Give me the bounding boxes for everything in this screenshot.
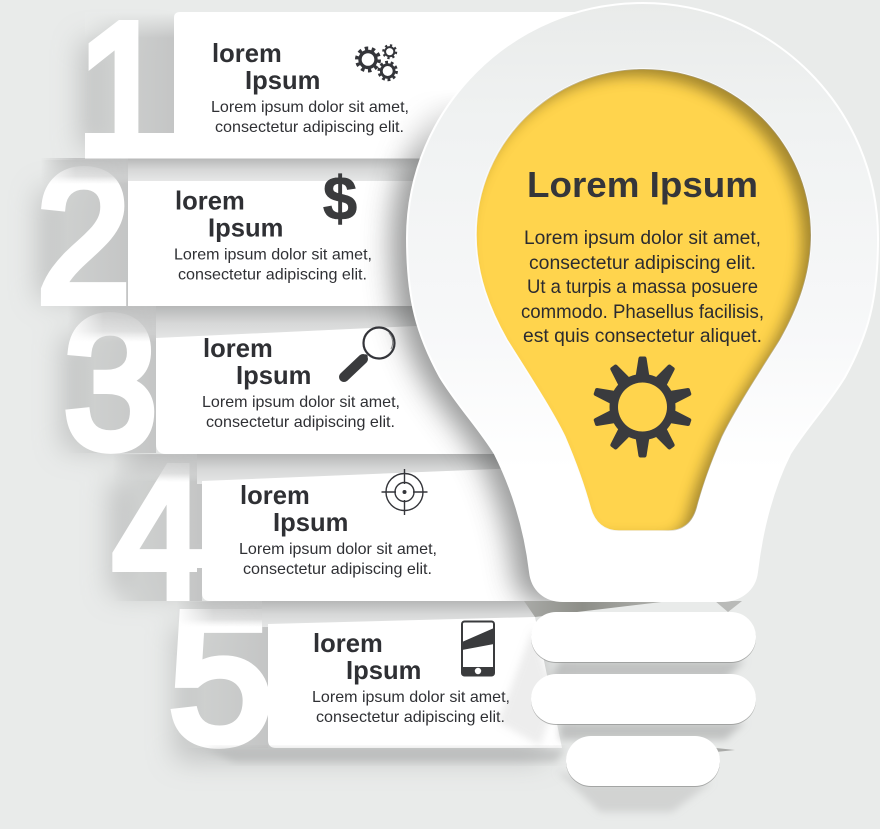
row 1 body text: consectetur adipiscing elit. xyxy=(215,119,404,136)
number 2: 2 xyxy=(37,134,130,341)
bulb title: Lorem Ipsum xyxy=(527,164,758,205)
row 3 heading: lorem xyxy=(203,335,273,363)
row 1 heading: Ipsum xyxy=(245,67,320,95)
bulb shadow xyxy=(372,100,554,601)
row 1 heading: lorem xyxy=(212,40,282,68)
row 5 body text xyxy=(312,689,510,726)
bulb body text: commodo. Phasellus facilisis, xyxy=(521,301,764,323)
row 2 body text xyxy=(174,246,372,284)
row 4 heading: Ipsum xyxy=(273,509,348,537)
icon: gears xyxy=(357,46,396,80)
row 2 heading xyxy=(175,188,283,242)
bulb outer xyxy=(407,3,878,601)
row 2 shadow panel xyxy=(41,160,128,306)
lamp base: pill 3 xyxy=(566,737,720,787)
row 5 heading xyxy=(313,630,421,685)
row 5 card xyxy=(268,617,562,748)
row 3 body text: Lorem ipsum dolor sit amet, xyxy=(202,394,400,411)
icon: dollar: $ xyxy=(323,165,357,234)
row 5 xyxy=(170,601,562,749)
pills shadows xyxy=(205,601,745,812)
icon: magnifier xyxy=(344,328,394,377)
row 1 card xyxy=(85,12,600,158)
row 3 shadow panel xyxy=(68,307,156,453)
row 3 body text: consectetur adipiscing elit. xyxy=(206,414,395,431)
row 2 top shadow xyxy=(48,158,128,182)
row 4 body text xyxy=(239,541,437,578)
row 4 body text: Lorem ipsum dolor sit amet, xyxy=(239,541,437,558)
bulb body text xyxy=(521,227,764,347)
row 2 heading: lorem xyxy=(175,188,245,216)
row 4 body text: consectetur adipiscing elit. xyxy=(243,561,432,578)
bulb yellow inner xyxy=(476,68,812,531)
row 3 heading xyxy=(203,335,311,390)
row 4 heading xyxy=(240,482,348,537)
row 3 heading: Ipsum xyxy=(236,362,311,390)
row 1 shadow panel xyxy=(85,12,174,137)
number 5: 5 xyxy=(169,575,272,782)
lamp base: pill 1 xyxy=(531,613,756,663)
row 1 heading xyxy=(212,40,320,95)
row 5 body text: consectetur adipiscing elit. xyxy=(316,709,505,726)
row 4 shadow panel xyxy=(113,455,202,601)
number 4: 4 xyxy=(113,429,206,636)
icon: large gear xyxy=(592,356,693,458)
lamp base: pill 2 xyxy=(531,675,756,725)
row 2 card xyxy=(128,181,548,306)
number 3: 3 xyxy=(64,280,157,487)
row 4 top shadow xyxy=(124,454,197,480)
row 4 card xyxy=(202,468,600,601)
bulb body text: Ut a turpis a massa posuere xyxy=(527,276,758,298)
row 5 body text: Lorem ipsum dolor sit amet, xyxy=(312,689,510,706)
row 2 xyxy=(41,158,420,306)
row 1 xyxy=(77,0,600,193)
row 5 heading: lorem xyxy=(313,630,383,658)
row 3 card xyxy=(156,323,540,454)
row 1 body text: Lorem ipsum dolor sit amet, xyxy=(211,99,409,116)
row 4 heading: lorem xyxy=(240,482,310,510)
row 2 body text: Lorem ipsum dolor sit amet, xyxy=(174,246,372,264)
row 1 body text xyxy=(211,99,409,136)
row 2 heading: Ipsum xyxy=(208,214,283,242)
row 4 xyxy=(112,454,552,601)
icon: phone xyxy=(462,622,494,676)
row 2 body text: consectetur adipiscing elit. xyxy=(178,266,367,284)
row 3 body text xyxy=(202,394,400,431)
bulb body text: est quis consectetur aliquet. xyxy=(523,325,762,347)
bulb body text: consectetur adipiscing elit. xyxy=(529,252,756,274)
row 5 heading: Ipsum xyxy=(346,657,421,685)
row 5 top shadow xyxy=(184,601,262,624)
row 3 top shadow xyxy=(77,306,156,339)
row 3 xyxy=(65,306,494,454)
icon: target xyxy=(382,469,428,515)
soft shadows behind the rows xyxy=(38,40,545,760)
row 5 shadow panel xyxy=(177,602,268,748)
bulb body text: Lorem ipsum dolor sit amet, xyxy=(524,227,761,249)
